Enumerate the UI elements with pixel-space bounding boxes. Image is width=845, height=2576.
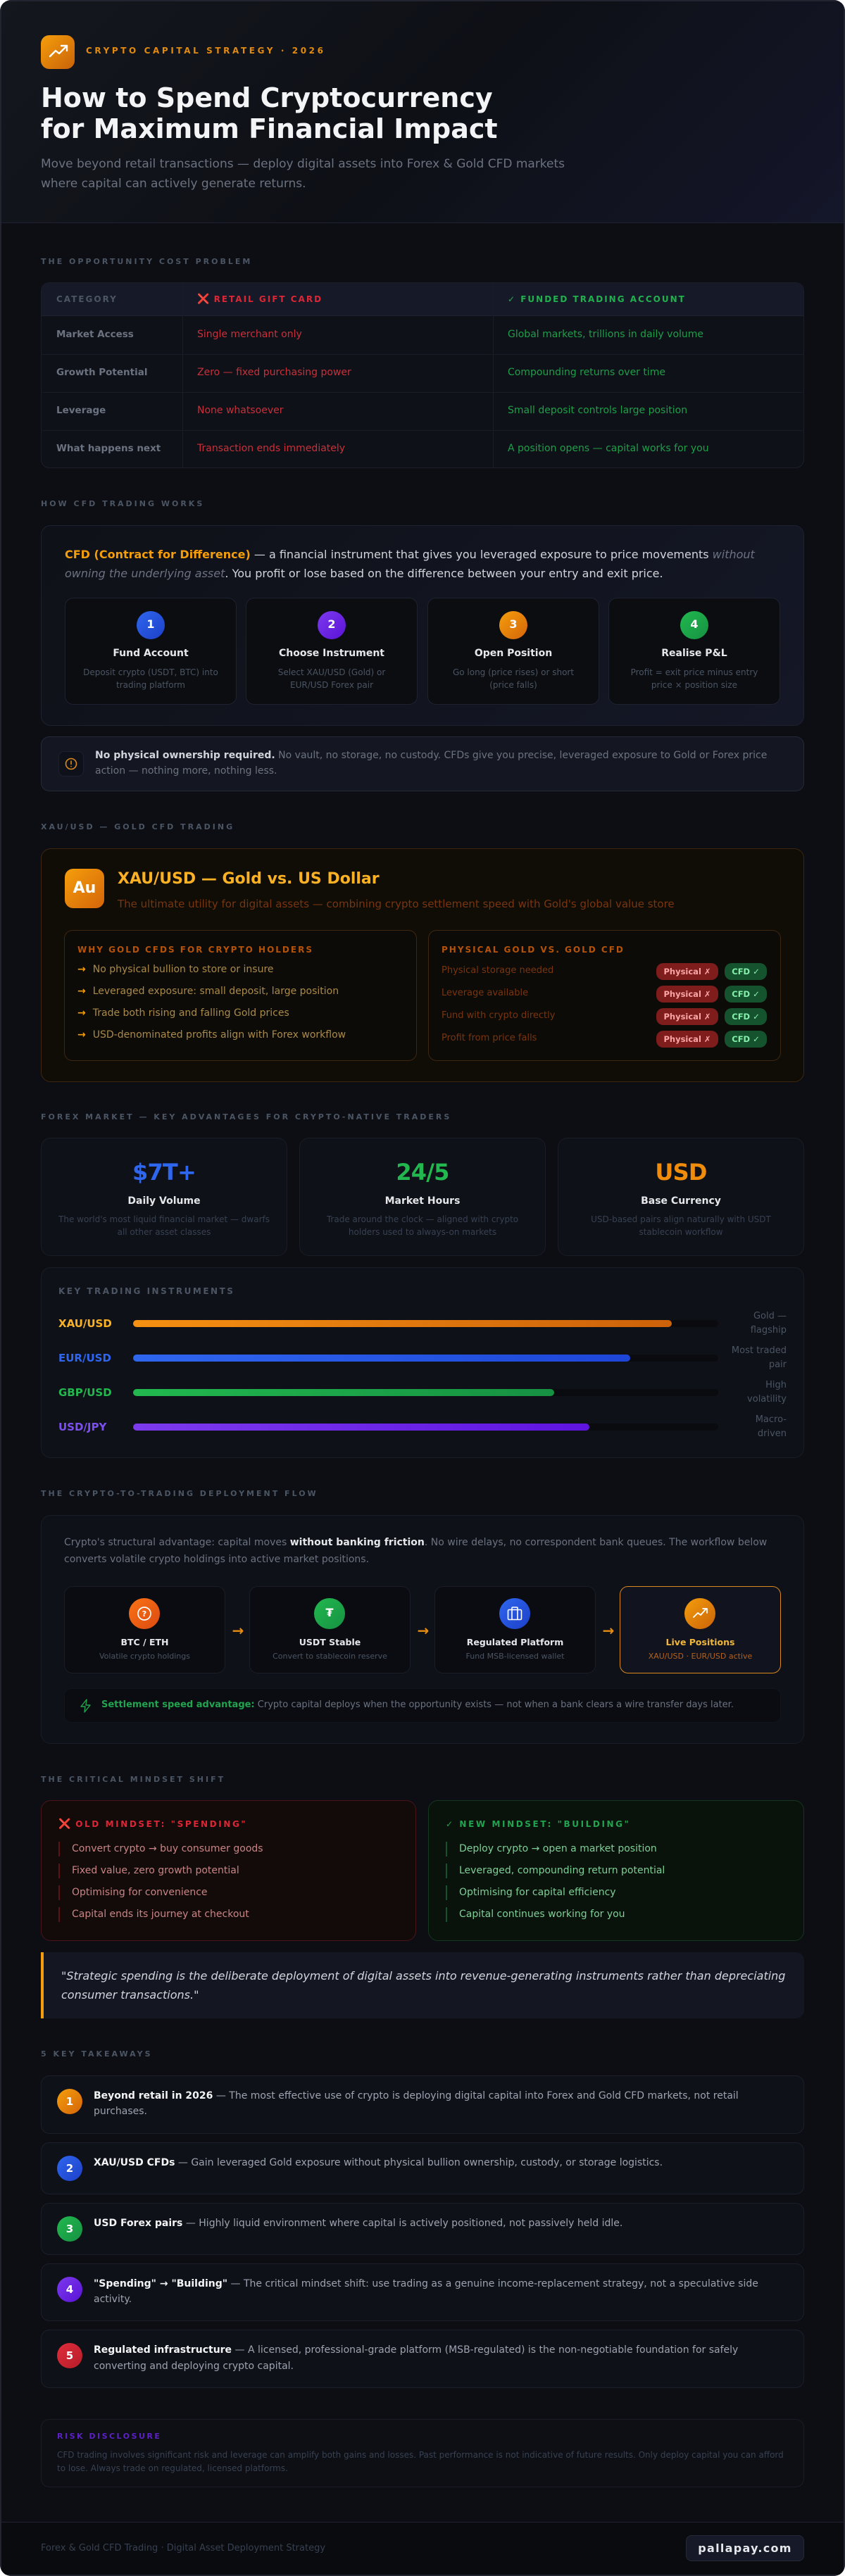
quote xyxy=(41,1952,804,2018)
step number xyxy=(137,611,165,639)
text: converting and deploying crypto capital. xyxy=(94,2361,294,2372)
list item: Convert crypto → buy consumer goods xyxy=(72,1843,263,1854)
risk text: CFD trading involves significant risk and leverage can amplify both gains and losses. Past performance is not indicative of future results. Only deploy capital you can afford xyxy=(57,2450,784,2460)
step description: trading platform xyxy=(116,680,185,690)
list item xyxy=(446,1864,784,1878)
step 3 xyxy=(427,598,599,705)
panel: comparison table xyxy=(41,282,804,468)
stat description: The world's most liquid financial market — dwarfs xyxy=(58,1214,270,1224)
row: leverage xyxy=(56,405,687,416)
quote: consumer transactions." xyxy=(61,1988,199,2002)
section heading: THE CRITICAL MINDSET SHIFT xyxy=(41,1775,225,1784)
step title: Open Position xyxy=(475,648,552,659)
row: what happens next: Transaction ends immediately xyxy=(197,443,345,454)
badge CFD: CFD ✓ xyxy=(732,989,760,999)
takeaway 1 xyxy=(41,2075,804,2134)
arrow: → xyxy=(418,1622,429,1639)
row: market access: Market Access xyxy=(56,329,134,340)
arrow: → xyxy=(603,1622,614,1639)
row: growth potential: Growth Potential xyxy=(56,367,147,378)
bar: EUR/USD: pair xyxy=(769,1359,787,1370)
section heading: THE CRYPTO-TO-TRADING DEPLOYMENT FLOW xyxy=(41,1489,318,1498)
row: leverage: None whatsoever xyxy=(197,405,283,416)
row: growth potential: Zero — fixed purchasing power xyxy=(197,367,351,378)
stat value: USD xyxy=(655,1159,707,1186)
comparison row: Fund with crypto directly xyxy=(442,1010,555,1021)
footer text: Forex & Gold CFD Trading · Digital Asset Deployment Strategy xyxy=(41,2543,325,2553)
step number: 4 xyxy=(690,617,699,631)
badge CFD xyxy=(725,986,767,1003)
subtitle: where capital can actively generate returns. xyxy=(41,177,306,191)
list item: Deploy crypto → open a market position xyxy=(459,1843,657,1854)
row: market access xyxy=(56,329,703,340)
text: XAU/USD CFDs — Gain leveraged Gold exposure without physical bullion ownership, custody, or storage logistics. xyxy=(94,2157,663,2168)
subtitle: Move beyond retail transactions — deploy digital assets into Forex & Gold CFD markets xyxy=(41,157,565,171)
takeaway 4 xyxy=(41,2263,804,2321)
risk heading: RISK DISCLOSURE xyxy=(57,2432,161,2441)
number: 4 xyxy=(66,2283,73,2296)
list item: Optimising for capital efficiency xyxy=(459,1887,616,1898)
bar: GBP/USD: High xyxy=(765,1380,787,1390)
section heading: THE OPPORTUNITY COST PROBLEM xyxy=(41,257,252,266)
callout: no physical ownership xyxy=(41,736,804,791)
arrow: → xyxy=(232,1622,244,1639)
step title: Realise P&L xyxy=(661,648,727,659)
list item: Capital ends its journey at checkout xyxy=(72,1909,249,1920)
badge CFD: CFD ✓ xyxy=(732,1012,760,1022)
list item: → No physical bullion to store or insure xyxy=(77,964,274,975)
text xyxy=(94,2278,758,2305)
stat card: daily volume xyxy=(41,1138,287,1256)
list item: → USD-denominated profits align with Forex workflow xyxy=(77,1029,346,1041)
stat description: Trade around the clock — aligned with crypto xyxy=(327,1214,518,1224)
step title: Fund Account xyxy=(113,648,189,659)
stat card: market hours xyxy=(299,1138,546,1256)
panel: key trading instruments xyxy=(41,1267,804,1458)
title: How to Spend Cryptocurrency xyxy=(41,82,493,113)
list item xyxy=(446,1842,784,1856)
list item: → Leveraged exposure: small deposit, large position xyxy=(77,986,339,997)
badge physical xyxy=(656,963,718,980)
text xyxy=(94,2090,739,2117)
text xyxy=(94,2344,738,2372)
title xyxy=(41,82,498,144)
flow card: BTC / ETH xyxy=(64,1586,225,1673)
text: purchases. xyxy=(94,2106,147,2117)
row: growth potential xyxy=(56,367,665,378)
stat description: all other asset classes xyxy=(118,1227,211,1237)
step 4 xyxy=(608,598,780,705)
eyebrow: CRYPTO CAPITAL STRATEGY · 2026 xyxy=(86,46,326,56)
icon: tether coin: ₮ xyxy=(325,1606,334,1619)
column: retail gift card: ❌ RETAIL GIFT CARD xyxy=(197,294,323,305)
icon: Au badge xyxy=(65,869,104,908)
bar: XAU/USD: flagship xyxy=(751,1325,787,1336)
text: "Spending" → "Building" — The critical mindset shift: use trading as a genuine income-replacement strategy, not a speculative side xyxy=(94,2278,758,2289)
list item: Leveraged, compounding return potential xyxy=(459,1865,665,1876)
column: funded trading account: ✓ FUNDED TRADING ACCOUNT xyxy=(508,294,686,304)
bar: EUR/USD xyxy=(58,1345,787,1370)
section heading: 5 KEY TAKEAWAYS xyxy=(41,2049,153,2059)
step description: EUR/USD Forex pair xyxy=(290,680,373,690)
step number xyxy=(499,611,527,639)
icon: trending chart logo xyxy=(41,35,75,69)
intro text: converts volatile crypto holdings into active market positions. xyxy=(64,1554,369,1565)
panel: gold CFD xyxy=(41,848,804,1082)
icon: lightning bolt xyxy=(80,1699,91,1713)
intro text: Crypto's structural advantage: capital moves without banking friction. No wire delays, no correspondent bank queues. The workflow below xyxy=(64,1537,767,1548)
bar: XAU/USD: Gold — xyxy=(753,1311,787,1321)
stat description xyxy=(327,1214,518,1237)
number xyxy=(57,2277,82,2302)
row: what happens next: A position opens — capital works for you xyxy=(508,443,709,454)
stat description: holders used to always-on markets xyxy=(349,1227,496,1237)
number xyxy=(57,2089,82,2114)
flow subtitle: Convert to stablecoin reserve xyxy=(273,1652,387,1661)
step description xyxy=(453,667,574,690)
list item: Capital continues working for you xyxy=(459,1909,625,1920)
icon: alert circle xyxy=(58,751,84,777)
icon: question coin xyxy=(129,1598,160,1629)
stat description: stablecoin workflow xyxy=(639,1227,723,1237)
settlement speed note xyxy=(64,1688,781,1723)
list item xyxy=(58,1907,396,1922)
number: 1 xyxy=(66,2095,73,2108)
icon: briefcase xyxy=(499,1598,530,1629)
panel: deployment flow xyxy=(41,1515,804,1744)
number xyxy=(57,2216,82,2242)
flow title: Regulated Platform xyxy=(467,1637,563,1647)
stat title: Base Currency xyxy=(641,1195,721,1207)
bar: GBP/USD: GBP/USD xyxy=(58,1386,112,1399)
callout text xyxy=(95,750,767,777)
badge physical xyxy=(656,1008,718,1025)
step description xyxy=(83,667,218,690)
step 1 xyxy=(65,598,237,705)
list item: Fixed value, zero growth potential xyxy=(72,1865,239,1876)
comparison row: Physical storage needed xyxy=(442,965,553,976)
step number xyxy=(318,611,346,639)
panel heading: ❌ OLD MINDSET: "SPENDING" xyxy=(58,1818,247,1830)
step 2 xyxy=(246,598,418,705)
table header row xyxy=(42,283,803,316)
panel heading: KEY TRADING INSTRUMENTS xyxy=(58,1286,234,1296)
intro text xyxy=(64,1537,767,1565)
badge physical: Physical ✗ xyxy=(663,989,711,999)
stat value: 24/5 xyxy=(396,1159,449,1186)
flow subtitle: Volatile crypto holdings xyxy=(99,1652,190,1661)
panel: why gold CFDs xyxy=(64,930,417,1061)
text: USD Forex pairs — Highly liquid environment where capital is actively positioned, not passively held idle. xyxy=(94,2218,622,2229)
text: Regulated infrastructure — A licensed, professional-grade platform (MSB-regulated) is the non-negotiable foundation for safely xyxy=(94,2344,738,2356)
badge CFD: CFD ✓ xyxy=(732,1034,760,1044)
intro text xyxy=(65,548,755,580)
bar: XAU/USD: XAU/USD xyxy=(58,1317,112,1330)
panel: how CFD works xyxy=(41,525,804,726)
stat description xyxy=(58,1214,270,1237)
list item xyxy=(446,1907,784,1922)
risk text xyxy=(57,2450,784,2473)
step description xyxy=(631,667,758,690)
badge physical: Physical ✗ xyxy=(663,1034,711,1044)
stat title: Daily Volume xyxy=(127,1195,201,1207)
note text: Settlement speed advantage: Crypto capital deploys when the opportunity exists — not when a bank clears a wire transfer days later. xyxy=(101,1699,734,1710)
section heading: HOW CFD TRADING WORKS xyxy=(41,499,204,508)
step description xyxy=(278,667,386,690)
text: activity. xyxy=(94,2294,132,2305)
comparison row xyxy=(442,986,767,1003)
takeaway 2 xyxy=(41,2142,804,2194)
list item xyxy=(58,1885,396,1900)
flow card: regulated platform xyxy=(434,1586,596,1673)
step description: Profit = exit price minus entry xyxy=(631,667,758,677)
badge CFD xyxy=(725,1031,767,1048)
flow title: USDT Stable xyxy=(299,1637,361,1647)
footer xyxy=(1,2522,844,2575)
row: market access: Global markets, trillions in daily volume xyxy=(508,329,703,340)
panel: new mindset xyxy=(428,1800,804,1941)
bar: USD/JPY: driven xyxy=(758,1428,787,1439)
stat description: USD-based pairs align naturally with USDT xyxy=(591,1214,771,1224)
subtitle xyxy=(41,157,565,191)
list item xyxy=(446,1885,784,1900)
step description: Go long (price rises) or short xyxy=(453,667,574,677)
step number: 1 xyxy=(146,617,155,631)
stat card: base currency xyxy=(558,1138,804,1256)
step title: Choose Instrument xyxy=(279,648,384,659)
header xyxy=(1,1,844,223)
gold subheading: The ultimate utility for digital assets — combining crypto settlement speed with Gold's global value store xyxy=(118,898,675,910)
icon: Au badge: Au xyxy=(73,879,96,897)
icon: question coin: ? xyxy=(142,1609,146,1619)
section heading: FOREX MARKET — KEY ADVANTAGES FOR CRYPTO-NATIVE TRADERS xyxy=(41,1112,451,1121)
number xyxy=(57,2343,82,2368)
bar: USD/JPY: USD/JPY xyxy=(58,1421,106,1433)
risk disclosure xyxy=(41,2419,804,2487)
intro text: owning the underlying asset. You profit or lose based on the difference between your entry and exit price. xyxy=(65,567,663,580)
bar: EUR/USD: Most traded xyxy=(732,1345,787,1356)
row: what happens next: What happens next xyxy=(56,443,161,454)
panel heading: PHYSICAL GOLD VS. GOLD CFD xyxy=(442,945,625,955)
step description: price × position size xyxy=(651,680,737,690)
list item xyxy=(58,1864,396,1878)
row: leverage: Leverage xyxy=(56,405,106,416)
badge physical: Physical ✗ xyxy=(663,1012,711,1022)
row: market access: Single merchant only xyxy=(197,329,302,340)
icon: trending chart xyxy=(684,1598,715,1629)
text: Beyond retail in 2026 — The most effective use of crypto is deploying digital capital into Forex and Gold CFD markets, not retail xyxy=(94,2090,739,2101)
step description: Deposit crypto (USDT, BTC) into xyxy=(83,667,218,677)
list item: → Trade both rising and falling Gold prices xyxy=(77,1007,289,1019)
stat description xyxy=(591,1214,771,1237)
brand badge: pallapay.com xyxy=(698,2542,792,2555)
quote: "Strategic spending is the deliberate deployment of digital assets into revenue-generating instruments rather than depreciating xyxy=(61,1969,785,1983)
row: what happens next xyxy=(56,443,709,454)
number xyxy=(57,2156,82,2181)
stat title: Market Hours xyxy=(385,1195,460,1207)
bar: EUR/USD: EUR/USD xyxy=(58,1352,111,1364)
icon: tether coin xyxy=(314,1598,345,1629)
flow subtitle: Fund MSB-licensed wallet xyxy=(466,1652,564,1661)
takeaway 5 xyxy=(41,2330,804,2388)
step number: 3 xyxy=(509,617,518,631)
step description: (price falls) xyxy=(489,680,537,690)
badge physical xyxy=(656,986,718,1003)
bar: USD/JPY xyxy=(58,1414,787,1439)
comparison row xyxy=(442,963,767,980)
number: 3 xyxy=(66,2223,73,2235)
list item xyxy=(58,1842,396,1856)
badge CFD xyxy=(725,1008,767,1025)
panel: old mindset xyxy=(41,1800,416,1941)
row: growth potential: Compounding returns over time xyxy=(508,367,665,378)
callout text: action — nothing more, nothing less. xyxy=(95,765,277,777)
badge physical xyxy=(656,1031,718,1048)
flow card: USDT stable xyxy=(249,1586,411,1673)
takeaway 3 xyxy=(41,2203,804,2255)
flow title: Live Positions xyxy=(666,1637,734,1647)
callout text: No physical ownership required. No vault, no storage, no custody. CFDs give you precise, leveraged exposure to Gold or Forex price xyxy=(95,750,767,761)
badge physical: Physical ✗ xyxy=(663,967,711,976)
brand badge xyxy=(686,2535,804,2561)
number: 2 xyxy=(66,2162,73,2175)
list item: Optimising for convenience xyxy=(72,1887,207,1898)
title: for Maximum Financial Impact xyxy=(41,113,498,144)
panel: physical vs CFD xyxy=(428,930,781,1061)
bar: GBP/USD: volatility xyxy=(747,1394,787,1405)
bar: GBP/USD xyxy=(58,1380,787,1405)
flow title: BTC / ETH xyxy=(120,1637,169,1647)
panel heading: ✓ NEW MINDSET: "BUILDING" xyxy=(446,1819,630,1829)
intro text: CFD (Contract for Difference) — a financial instrument that gives you leveraged exposure to price movements without xyxy=(65,548,755,561)
gold heading: XAU/USD — Gold vs. US Dollar xyxy=(118,870,380,888)
comparison row: Profit from price falls xyxy=(442,1033,537,1043)
comparison row xyxy=(442,1031,767,1048)
stat value: $7T+ xyxy=(132,1159,196,1186)
risk text: to lose. Always trade on regulated, licensed platforms. xyxy=(57,2463,288,2473)
flow subtitle: XAU/USD · EUR/USD active xyxy=(649,1652,752,1661)
badge CFD: CFD ✓ xyxy=(732,967,760,976)
number: 5 xyxy=(66,2349,73,2362)
step number xyxy=(680,611,708,639)
section heading: XAU/USD — GOLD CFD TRADING xyxy=(41,822,234,831)
bar: USD/JPY: Macro- xyxy=(756,1414,787,1425)
row: leverage: Small deposit controls large position xyxy=(508,405,687,416)
comparison row: Leverage available xyxy=(442,988,528,998)
bar: XAU/USD xyxy=(58,1311,787,1336)
step description: Select XAU/USD (Gold) or xyxy=(278,667,385,677)
panel heading: WHY GOLD CFDS FOR CRYPTO HOLDERS xyxy=(77,945,313,955)
column: category: CATEGORY xyxy=(56,294,118,304)
step number: 2 xyxy=(327,617,336,631)
comparison row xyxy=(442,1008,767,1025)
flow card: live positions xyxy=(620,1586,781,1673)
badge CFD xyxy=(725,963,767,980)
